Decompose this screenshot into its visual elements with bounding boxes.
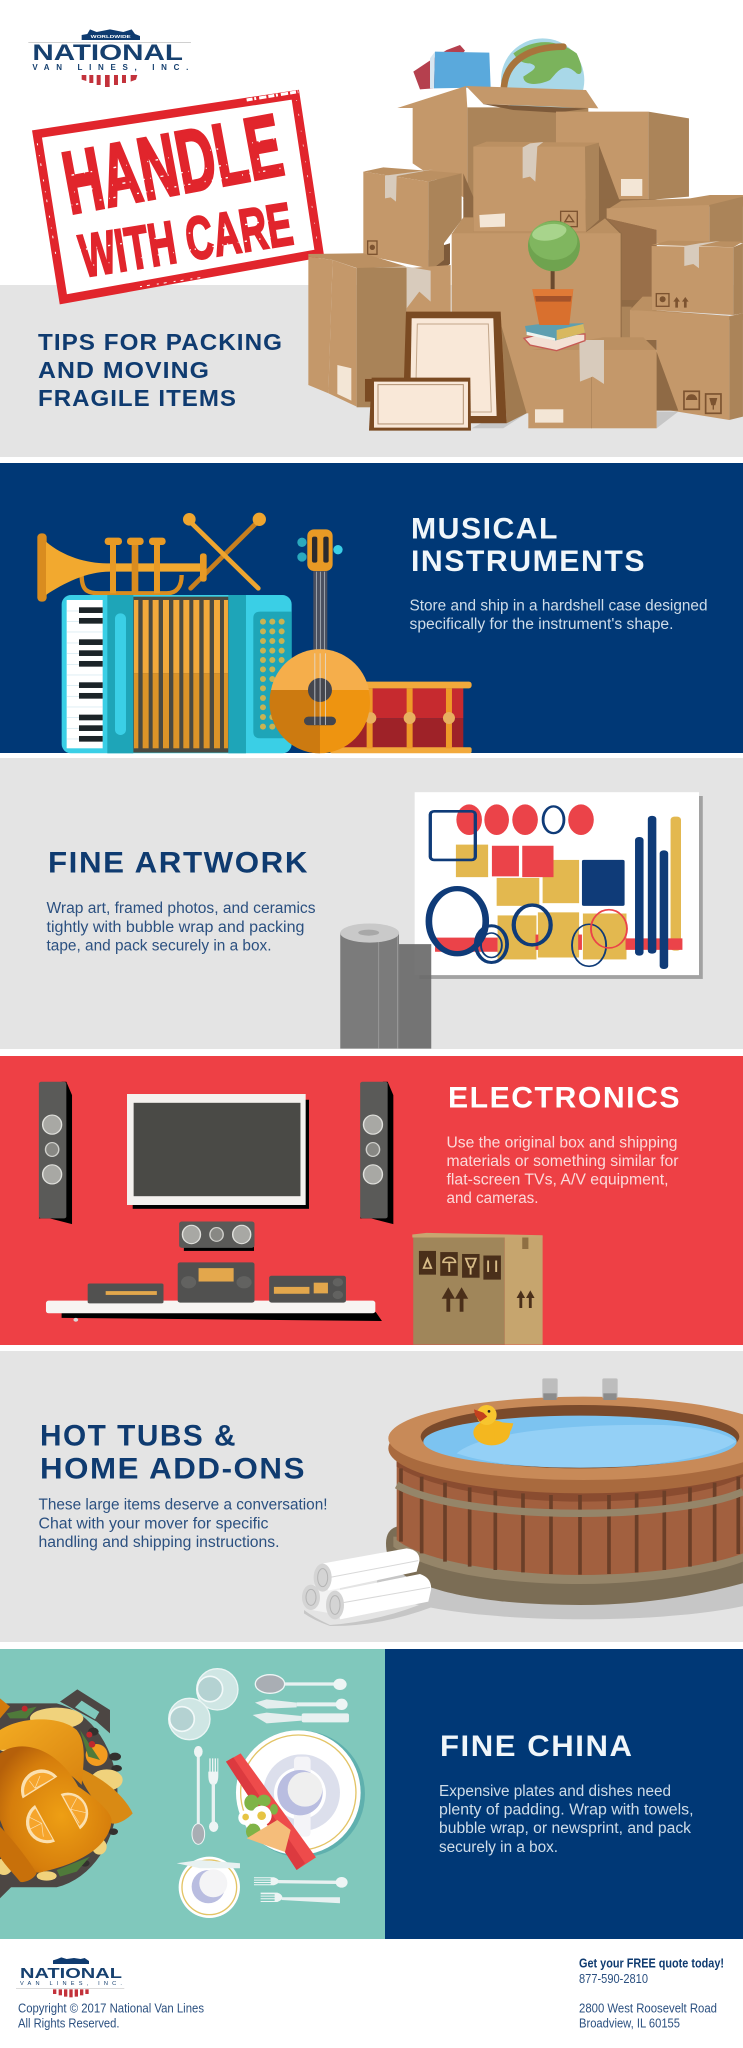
body text: fine china [439,1783,694,1856]
accordion bellows [133,597,228,753]
forks [254,1877,348,1903]
amplifier [269,1276,346,1303]
rubber duck [473,1405,513,1445]
stamp: handle with care [37,92,319,299]
body text: electronics: flat-screen TVs, A/V equipment, [446,1172,668,1188]
panel: electronics [0,1056,743,1345]
illustration: abstract painting and bubble wrap roll [340,792,703,1049]
heading: musical instruments [411,512,646,578]
box: right middle [607,195,743,300]
body text: electronics: Use the original box and shipping [446,1134,678,1152]
body text: musical instruments: Store and ship in a hardshell case designed [410,598,708,614]
logo: National Van Lines [28,29,191,87]
heading: tips for packing: FRAGILE ITEMS [38,385,237,411]
logo: National Van Lines: WORLDWIDE [91,34,131,40]
trumpet [37,533,207,602]
body text: hot tubs [38,1496,328,1551]
body text: hot tubs: Chat with your mover for specific [38,1516,269,1532]
box: upper middle [463,142,599,232]
copyright [18,2002,204,2030]
heading: hot tubs and home add-ons: HOT TUBS & [40,1420,237,1452]
contact details: 2800 West Roosevelt Road [579,2002,717,2016]
drum [330,682,472,753]
books stack [524,323,585,351]
panel: musical instruments [0,463,743,753]
stamp words: with care: WITH CARE [75,189,297,290]
illustration: home theater [39,1082,543,1345]
cutlery: right top [253,1675,349,1723]
body text: hot tubs: handling and shipping instructions. [38,1534,280,1551]
box: front small [528,337,657,428]
accordion [62,595,292,753]
body text: electronics [446,1134,678,1207]
copyright: Copyright © 2017 National Van Lines [18,2002,204,2016]
panel: footer [16,1956,724,2030]
icon: globe [501,38,584,122]
panel: header [0,29,743,457]
body text: fine artwork [46,900,316,954]
body text: fine china: Expensive plates and dishes need [439,1783,671,1800]
box: back right [556,112,689,205]
body text: fine artwork: tightly with bubble wrap and packing [46,919,304,936]
footer logo [16,1957,124,1997]
heading: musical instruments: MUSICAL [411,512,559,546]
footer logo: NATIONAL [20,1966,122,1982]
heading: hot tubs and home add-ons [40,1420,306,1486]
body text: fine artwork: Wrap art, framed photos, and ceramics [46,900,316,917]
contact details [579,1956,724,2030]
speaker: left [39,1082,72,1224]
roast turkey on pan [0,1689,133,1898]
heading: fine china: FINE CHINA [440,1730,634,1763]
box: open top [397,86,598,200]
dinner plate [236,1730,365,1857]
cutlery: left [192,1746,218,1844]
heading: tips for packing [38,329,283,411]
plant in pot [528,221,580,325]
heading: fine artwork: FINE ARTWORK [48,846,309,880]
contact details: Get your FREE quote today! [579,1956,724,1970]
body text: musical instruments [410,598,708,633]
logo: National Van Lines: VAN LINES, INC. [32,63,188,72]
centre speaker [179,1221,254,1251]
orange slices [21,1769,88,1843]
box: left large [308,253,451,408]
television [127,1094,309,1209]
footer logo: VAN LINES, INC. [20,1981,122,1987]
contact details: 877-590-2810 [579,1972,648,1986]
heading: tips for packing: TIPS FOR PACKING [38,329,283,355]
napkin with flowers [226,1753,316,1870]
illustration: table setting [0,1669,365,1918]
roll of wrap [340,923,431,1049]
heading: hot tubs and home add-ons: HOME ADD-ONS [40,1452,306,1486]
shipping box [412,1233,543,1345]
tub base [386,1527,743,1605]
shelf [46,1301,382,1322]
box: centre large [452,217,621,413]
box: right lower [622,297,743,420]
side plate and knife [177,1857,240,1918]
glasses [169,1669,238,1740]
tub barrel [397,1457,743,1575]
box: right small [652,241,743,315]
box: left upper [363,167,462,275]
body text: fine artwork: tape, and pack securely in a box. [46,938,272,954]
panel: hot tubs [0,1351,743,1642]
body text: hot tubs: These large items deserve a conversation! [38,1496,328,1514]
water [423,1416,737,1468]
dvd player [88,1283,163,1303]
speaker: right [360,1082,393,1224]
copyright: All Rights Reserved. [18,2016,120,2030]
panel: fine china [0,1649,743,1939]
body text: fine china: plenty of padding. Wrap with towels, [439,1802,694,1818]
tub rim [388,1397,743,1493]
logo: National Van Lines: NATIONAL [32,40,183,65]
stamp word: handle: HANDLE [55,95,290,233]
accordion keys [67,600,103,748]
drumsticks [183,513,266,588]
heading: musical instruments: INSTRUMENTS [411,545,646,578]
body text: electronics: materials or something similar for [446,1153,678,1170]
illustration: stack of moving boxes [308,38,743,431]
illustration: rolled towels [302,1548,433,1626]
heading: tips for packing: AND MOVING [38,357,210,383]
body text: fine china: securely in a box. [439,1839,558,1856]
faucets [542,1378,618,1400]
body text: electronics: and cameras. [446,1190,538,1207]
picture frames [365,312,527,431]
body text: musical instruments: specifically for the instrument's shape. [410,616,674,633]
painting [415,792,703,979]
receiver [178,1262,254,1303]
illustration: instruments [37,513,472,753]
mandolin [269,529,370,753]
panel: fine artwork [0,758,743,1049]
heading: electronics: ELECTRONICS [448,1082,681,1114]
body text: fine china: bubble wrap, or newsprint, and pack [439,1820,691,1837]
contact details: Broadview, IL 60155 [579,2016,680,2030]
shadows on floor [472,413,527,428]
illustration: hot tub [377,1378,743,1619]
